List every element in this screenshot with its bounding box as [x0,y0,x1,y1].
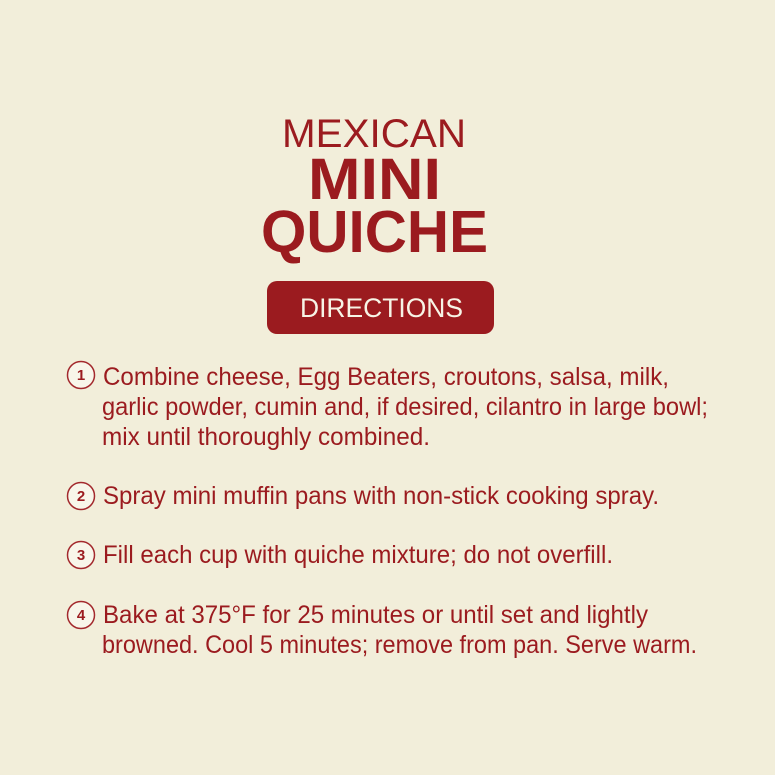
number badge 3 [68,542,94,568]
title: MINI [308,147,441,212]
step 4 text: browned. Cool 5 minutes; remove from pan. Serve warm. [102,631,697,659]
number badge 2 [68,482,94,510]
step 4 text [102,601,697,659]
step 3 [68,541,613,569]
step 4 [68,601,697,659]
step 1 text: Combine cheese, Egg Beaters, croutons, salsa, milk, [103,363,669,391]
step 2 [68,482,659,510]
number badge 3: 3 [77,547,85,564]
step 1 [68,362,708,451]
directions banner: DIRECTIONS [300,293,463,323]
step 1 text: mix until thoroughly combined. [102,423,430,451]
step 1 text: garlic powder, cumin and, if desired, cilantro in large bowl; [102,393,708,421]
number badge 1 [68,362,94,388]
title: MEXICAN [282,112,466,156]
number badge 2: 2 [77,488,85,505]
step 1 text [102,363,708,451]
number badge 1: 1 [77,367,85,384]
directions banner [267,281,494,334]
number badge 4: 4 [77,607,86,624]
title [261,112,488,265]
step 3 text: Fill each cup with quiche mixture; do not overfill. [103,541,613,569]
number badge 4 [68,602,94,628]
step 4 text: Bake at 375°F for 25 minutes or until set and lightly [103,601,648,629]
step 2 text: Spray mini muffin pans with non-stick cooking spray. [103,482,659,510]
title: QUICHE [261,199,488,265]
